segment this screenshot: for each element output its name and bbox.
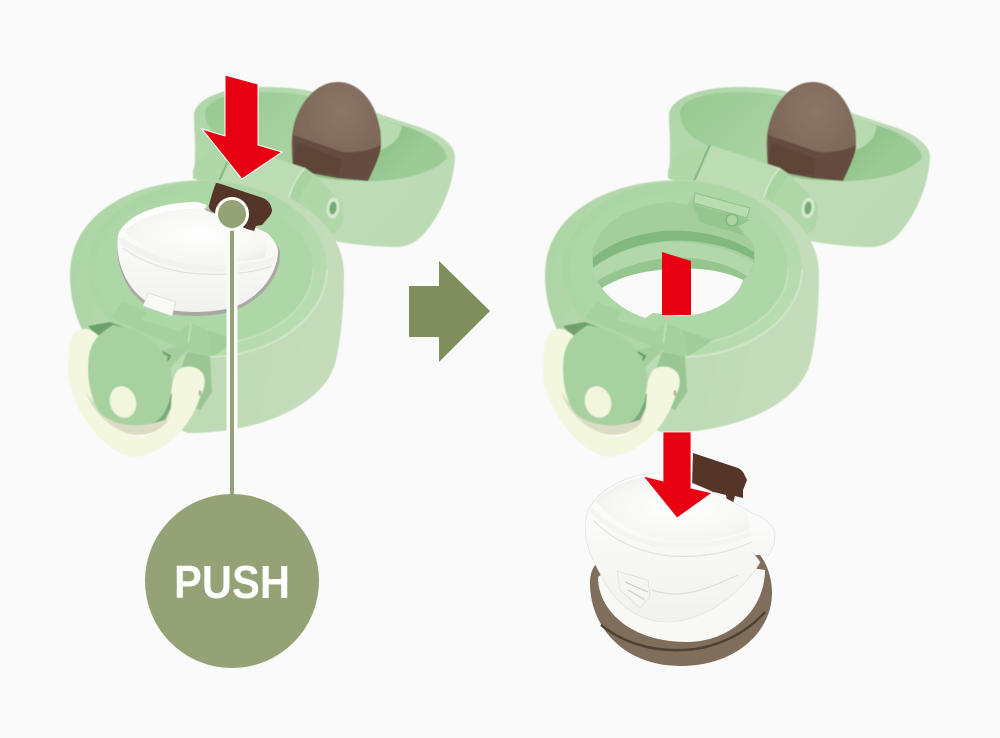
latch and handle loop: [68, 322, 212, 457]
PUSH badge: PUSH: [174, 556, 290, 608]
lid with brown stopper: [193, 82, 455, 247]
transition arrow: [409, 261, 490, 362]
lid with brown stopper: [668, 82, 930, 247]
left device: lid open with valve in place: [68, 75, 455, 500]
brown release button: [209, 183, 272, 231]
white valve dome detached: [585, 473, 775, 622]
white valve dome in opening: [117, 202, 280, 316]
red press arrow: [202, 75, 282, 179]
brown release button detached: [692, 453, 747, 503]
cap body: [70, 180, 344, 433]
red shaft through opening: [662, 252, 691, 315]
red arrow below cap: [643, 432, 712, 518]
PUSH leader line outline: [226, 215, 238, 432]
button marker dot: [216, 198, 248, 230]
cap body: [545, 180, 819, 433]
latch and handle loop: [543, 322, 687, 457]
PUSH leader line: [230, 215, 234, 500]
PUSH badge: [145, 494, 319, 668]
right device: valve removed: [543, 82, 930, 666]
brown sealing base: [590, 555, 772, 666]
open ring hole: [592, 193, 755, 318]
